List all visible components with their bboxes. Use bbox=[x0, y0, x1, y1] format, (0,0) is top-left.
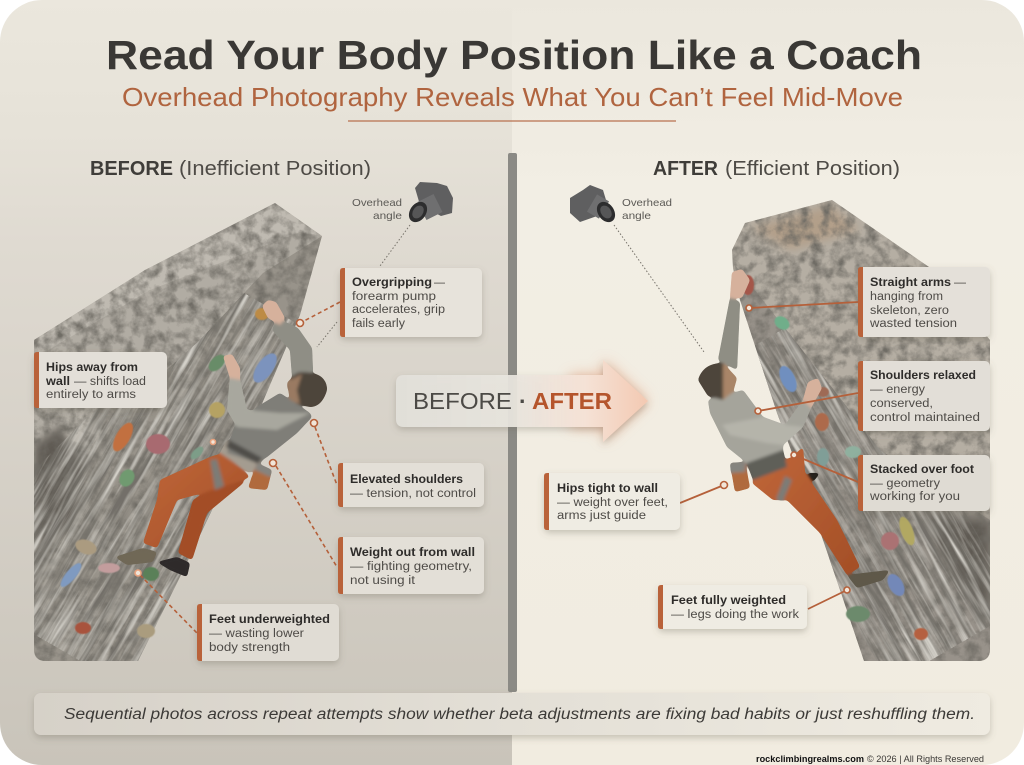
before-after arrow: AFTER bbox=[532, 388, 612, 414]
callout: stacked over foot: working for you bbox=[869, 491, 960, 503]
callout: elevated shoulders: — tension, not control bbox=[350, 488, 476, 500]
camera: left bbox=[405, 182, 453, 226]
callout: shoulders relaxed: conserved, bbox=[870, 398, 933, 410]
connectors: right callouts bbox=[680, 302, 858, 609]
footer credit bbox=[756, 754, 984, 764]
callout: hips tight to wall bbox=[544, 473, 680, 530]
left boulder holds bbox=[58, 308, 281, 638]
callout: hips away from wall: Hips away from bbox=[46, 362, 138, 374]
callout: feet fully weighted bbox=[658, 585, 807, 629]
camera: right bbox=[570, 185, 619, 226]
callout: shoulders relaxed: — energy bbox=[870, 384, 925, 396]
connectors: left callouts bbox=[140, 302, 340, 633]
callout: overgripping: fails early bbox=[352, 318, 405, 330]
callout: hips away from wall: wall bbox=[45, 376, 70, 388]
right boulder holds bbox=[742, 275, 928, 640]
callout: weight out from wall: — fighting geometry, bbox=[350, 561, 472, 573]
footer credit: rockclimbingrealms.com bbox=[756, 754, 864, 764]
callout: hips tight to wall: arms just guide bbox=[557, 510, 646, 522]
caption: right overhead angle bbox=[622, 197, 672, 222]
caption: left overhead angle: angle bbox=[373, 210, 402, 222]
footer credit: © 2026 | All Rights Reserved bbox=[867, 754, 984, 764]
callout: shoulders relaxed: control maintained bbox=[870, 412, 980, 424]
right boulder bbox=[732, 200, 990, 661]
callout: elevated shoulders: Elevated shoulders bbox=[350, 474, 463, 486]
callout: weight out from wall: Weight out from wall bbox=[350, 547, 475, 559]
heading: after bbox=[653, 158, 900, 180]
callout: feet underweighted bbox=[197, 604, 339, 661]
callout: hips away from wall: — shifts load bbox=[74, 376, 146, 388]
callout: straight arms: Straight arms bbox=[870, 277, 951, 289]
callout: stacked over foot: — geometry bbox=[870, 478, 940, 490]
caption: left overhead angle: Overhead bbox=[352, 197, 402, 209]
left boulder bbox=[34, 203, 322, 661]
callout: shoulders relaxed: Shoulders relaxed bbox=[870, 370, 976, 382]
takeaway bar: Sequential photos across repeat attempts show whether beta adjustments are fixing bad habits or just reshuffling them. bbox=[64, 706, 975, 723]
caption: right overhead angle: angle bbox=[622, 210, 651, 222]
callout: shoulders relaxed bbox=[858, 361, 990, 431]
connectors: camera sight lines bbox=[317, 225, 704, 352]
callout: hips tight to wall: Hips tight to wall bbox=[557, 483, 658, 495]
callout: stacked over foot bbox=[858, 455, 990, 511]
callout: overgripping: forearm pump bbox=[352, 291, 436, 303]
heading: before bbox=[90, 158, 371, 180]
before-after arrow bbox=[396, 360, 648, 442]
callout: straight arms: skeleton, zero bbox=[870, 305, 949, 317]
callout: weight out from wall bbox=[338, 537, 484, 594]
callout: feet underweighted: Feet underweighted bbox=[209, 614, 330, 626]
takeaway bar bbox=[34, 693, 990, 735]
subtitle: Overhead Photography Reveals What You Can’t Feel Mid-Move bbox=[122, 82, 903, 112]
before-after arrow: BEFORE bbox=[413, 388, 512, 414]
connector markers: right bbox=[720, 305, 850, 593]
callout: stacked over foot: Stacked over foot bbox=[870, 464, 974, 476]
callout: hips away from wall: entirely to arms bbox=[46, 389, 136, 401]
callout: straight arms: — bbox=[954, 277, 967, 289]
callout: weight out from wall: not using it bbox=[350, 575, 416, 587]
before-after arrow: · bbox=[519, 388, 527, 414]
callout: hips tight to wall: — weight over feet, bbox=[557, 497, 668, 509]
title: Read Your Body Position Like a Coach bbox=[106, 32, 922, 78]
callout: feet underweighted: — wasting lower bbox=[209, 628, 304, 640]
callout: elevated shoulders bbox=[338, 463, 484, 507]
caption: left overhead angle bbox=[352, 197, 402, 222]
heading: after: AFTER bbox=[653, 158, 719, 180]
callout: overgripping bbox=[340, 268, 482, 337]
right climber bbox=[698, 269, 890, 588]
callout: straight arms: hanging from bbox=[870, 291, 943, 303]
callout: overgripping: accelerates, grip bbox=[352, 304, 445, 316]
heading: before: (Inefficient Position) bbox=[179, 158, 371, 180]
left climber bbox=[115, 300, 327, 577]
callout: feet fully weighted: Feet fully weighted bbox=[671, 595, 786, 607]
callout: feet underweighted: body strength bbox=[209, 642, 290, 654]
heading: after: (Efficient Position) bbox=[725, 158, 900, 180]
center divider bbox=[508, 153, 517, 692]
callout: hips away from wall bbox=[34, 352, 167, 408]
callout: overgripping: Overgripping bbox=[352, 277, 432, 289]
callout: straight arms bbox=[858, 267, 990, 337]
heading: before: BEFORE bbox=[90, 158, 173, 180]
callout: feet fully weighted: — legs doing the work bbox=[671, 609, 799, 621]
callout: overgripping: — bbox=[434, 277, 445, 289]
callout: straight arms: wasted tension bbox=[869, 318, 957, 330]
caption: right overhead angle: Overhead bbox=[622, 197, 672, 209]
connector markers: left bbox=[135, 320, 318, 576]
